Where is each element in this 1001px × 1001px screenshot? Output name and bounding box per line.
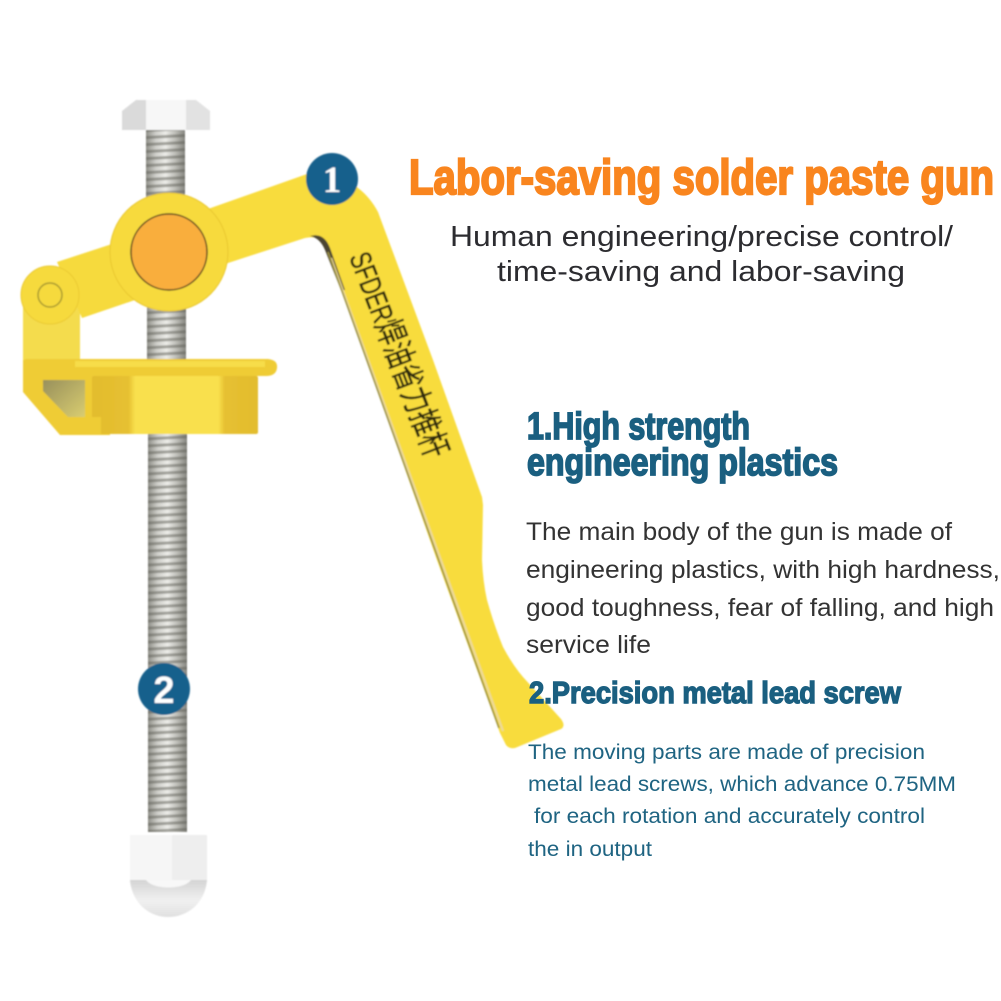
marker 2: 2 <box>153 670 175 712</box>
body: precision screw <box>528 741 956 861</box>
subtitle <box>450 221 954 288</box>
body: high strength: good toughness, fear of falling, and high <box>526 594 994 622</box>
body: precision screw: The moving parts are made of precision <box>528 741 925 764</box>
lead screw <box>146 128 187 832</box>
bracket <box>23 305 277 435</box>
body: high strength: engineering plastics, with high hardness, <box>526 556 1000 584</box>
body: precision screw: the in output <box>528 838 652 861</box>
subtitle: Human engineering/precise control/ <box>450 221 954 253</box>
hub <box>110 193 228 311</box>
flange <box>25 359 277 376</box>
body: precision screw: for each rotation and accurately control <box>534 805 925 828</box>
slot <box>43 380 85 417</box>
left arm <box>57 243 135 318</box>
cap nut <box>130 835 207 917</box>
body: precision screw: metal lead screws, which advance 0.75MM <box>528 773 956 796</box>
illustration: solder paste gun <box>21 100 564 917</box>
body: high strength <box>526 518 1000 659</box>
lever arm <box>205 170 564 748</box>
body: high strength: service life <box>526 631 651 659</box>
marker 1: 1 <box>323 160 341 201</box>
brand text on lever: SFDER焊油省力推杆 <box>342 246 455 463</box>
cup <box>92 376 258 434</box>
body: high strength: The main body of the gun is made of <box>526 518 952 546</box>
heading: high strength: 1.High strength <box>527 406 750 448</box>
bolt head <box>122 100 210 130</box>
heading: high strength: engineering plastics <box>527 442 838 484</box>
heading: precision screw: 2.Precision metal lead screw <box>529 675 902 710</box>
heading: high strength <box>527 406 838 484</box>
marker 1 <box>306 153 358 205</box>
pivot link <box>21 266 79 324</box>
marker 2 <box>138 663 190 715</box>
subtitle: time-saving and labor-saving <box>497 256 905 288</box>
